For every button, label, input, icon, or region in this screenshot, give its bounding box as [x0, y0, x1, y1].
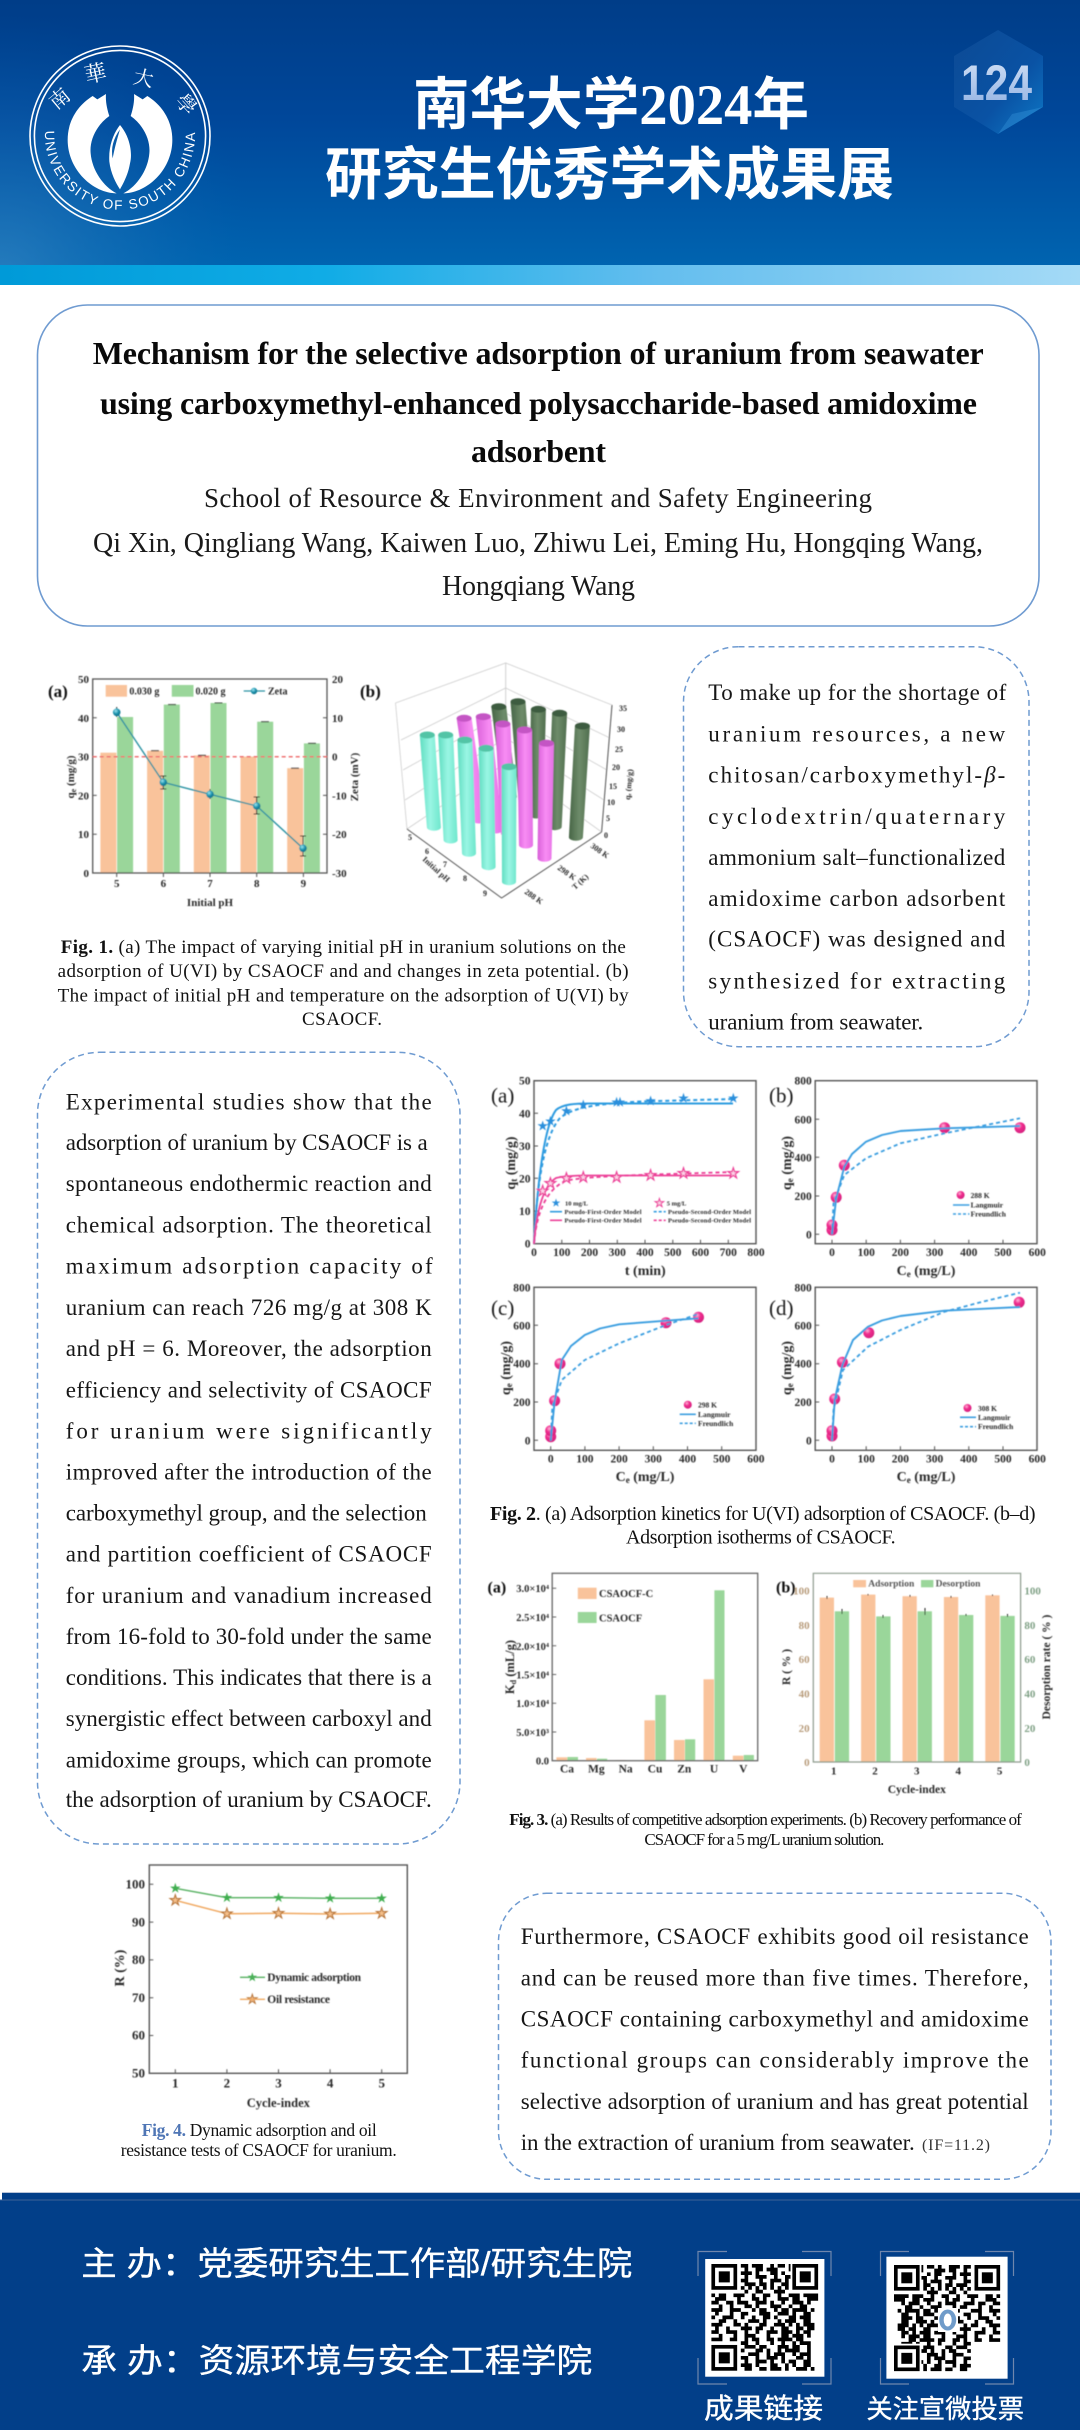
chart: fig 2c isotherm 298 K: 100	[576, 1453, 594, 1465]
panel: experimental findings text: and partition coefficient of CSAOCF	[66, 1542, 432, 1567]
chart: fig 2b isotherm 288 K: e	[785, 1178, 795, 1182]
chart: fig 2d isotherm 308 K	[769, 1282, 1046, 1485]
badge: number 124	[954, 30, 1043, 134]
chart: fig 2b isotherm 288 K: C	[897, 1264, 907, 1279]
chart: fig 2a adsorption kinetics: 600	[692, 1247, 709, 1259]
chart: fig 2a adsorption kinetics: 0	[525, 1239, 531, 1251]
chart: fig 2b isotherm 288 K: Freundlich	[971, 1210, 1007, 1218]
chart: fig 3a competitive adsorption: Cu	[648, 1764, 663, 1776]
chart: fig 2c isotherm 298 K: 400	[679, 1453, 696, 1465]
panel: introduction text: To make up for the shortage of	[708, 680, 1007, 705]
panel: conclusion text: (IF=11.2)	[922, 2137, 990, 2154]
chart: fig 1b 3D cylinders: 6	[425, 847, 429, 856]
chart: fig 2b isotherm 288 K: 200	[794, 1191, 812, 1203]
chart: fig 1a pH bars and zeta: (a)	[48, 682, 68, 701]
panel: experimental findings text: uranium can reach 726 mg/g at 308 K	[66, 1295, 432, 1320]
chart: fig 3b recovery performance: 1	[831, 1766, 836, 1778]
chart: fig 1a pH bars and zeta: 0	[84, 868, 90, 880]
panel: paper title card	[38, 305, 1039, 626]
chart: fig 3b recovery performance: Desorption rate ( % )	[1041, 1614, 1053, 1719]
panel: experimental findings text: improved after the introduction of the	[66, 1459, 432, 1484]
heading: paper title: adsorbent	[471, 433, 606, 469]
label: follow and vote: 关注宣微投票	[866, 2394, 1024, 2424]
panel: introduction text: uranium from seawater.	[708, 1009, 923, 1034]
chart: fig 1a pH bars and zeta: 10	[78, 829, 90, 841]
chart: fig 1a pH bars and zeta: 20	[78, 790, 90, 802]
chart: fig 2b isotherm 288 K: 800	[794, 1076, 812, 1088]
logo: University of South China: 南	[42, 80, 76, 115]
chart: fig 2a adsorption kinetics: 10 mg/L	[565, 1200, 589, 1208]
chart: fig 3a competitive adsorption: 0.0	[536, 1757, 549, 1768]
panel: experimental findings text: conditions. This indicates that there is a	[66, 1665, 432, 1690]
chart: fig 2d isotherm 308 K: 100	[858, 1453, 875, 1465]
text: school: School of Resource & Environment and Safety Engineering	[204, 483, 872, 513]
chart: fig 3a competitive adsorption: Mg	[588, 1764, 605, 1776]
heading: paper title	[93, 335, 984, 469]
caption: fig 3	[509, 1810, 1022, 1849]
chart: fig 2c isotherm 298 K: 200	[513, 1397, 531, 1409]
chart: fig 1b 3D cylinders: qₑ (mg/g)	[623, 768, 635, 800]
panel: introduction text: cyclodextrin/quaternary	[708, 804, 1006, 829]
chart: fig 3a competitive adsorption: CSAOCF-C	[599, 1589, 653, 1600]
chart: fig 2c isotherm 298 K: q	[499, 1387, 514, 1395]
chart: fig 3a competitive adsorption: (mL/g)	[503, 1640, 517, 1680]
chart: fig 3b recovery performance: 80	[1024, 1620, 1036, 1632]
figure 2	[490, 1076, 1046, 1548]
chart: fig 2b isotherm 288 K: 0	[806, 1229, 812, 1241]
chart: fig 3b recovery performance: 4	[955, 1766, 961, 1778]
chart: fig 2c isotherm 298 K: 400	[513, 1359, 531, 1371]
chart: fig 1b 3D cylinders: 8	[463, 874, 467, 883]
panel: conclusion text: functional groups can considerably improve the	[521, 2048, 1029, 2073]
chart: fig 1b 3D cylinders: 10	[607, 798, 615, 807]
chart: fig 2b isotherm 288 K: 400	[960, 1247, 978, 1259]
caption: fig 4: resistance tests of CSAOCF for uranium.	[121, 2140, 397, 2160]
chart: fig 2c isotherm 298 K: 300	[645, 1453, 662, 1465]
chart: fig 2d isotherm 308 K: 600	[1029, 1453, 1046, 1465]
chart: fig 2b isotherm 288 K: 288 K	[971, 1191, 990, 1200]
chart: fig 2d isotherm 308 K: 800	[794, 1282, 812, 1294]
chart: fig 2a adsorption kinetics: 200	[581, 1247, 598, 1259]
chart: fig 1b 3D cylinders: 20	[612, 763, 620, 772]
chart: fig 2b isotherm 288 K: 400	[794, 1152, 812, 1164]
chart: fig 2c isotherm 298 K: (mg/g)	[499, 1341, 514, 1383]
chart: fig 2d isotherm 308 K: Freundlich	[978, 1422, 1014, 1431]
chart: fig 3b recovery performance: 60	[799, 1654, 810, 1666]
chart: fig 1a pH bars and zeta: 30	[78, 752, 90, 764]
chart: fig 1b 3D cylinders: 35	[619, 704, 627, 713]
banner title	[325, 74, 894, 207]
panel: experimental findings text: spontaneous endothermic reaction and	[66, 1171, 432, 1196]
chart: fig 2c isotherm 298 K: 600	[513, 1320, 531, 1332]
chart: fig 2c isotherm 298 K	[491, 1282, 765, 1485]
chart: fig 3a competitive adsorption: 2.0×10⁴	[516, 1642, 550, 1653]
chart: fig 2d isotherm 308 K: 0	[829, 1453, 835, 1465]
QR code: results link	[698, 2252, 831, 2384]
chart: fig 2b isotherm 288 K: (mg/g)	[780, 1136, 795, 1178]
chart: fig 1a pH bars and zeta: Initial pH	[187, 897, 234, 909]
text: authors: Hongqiang Wang	[442, 571, 635, 602]
chart: fig 2b isotherm 288 K: 600	[794, 1114, 812, 1126]
panel: experimental findings text: Experimental studies show that the	[66, 1089, 432, 1114]
chart: fig 1b 3D cylinders: Initial pH	[421, 855, 452, 884]
chart: fig 3a competitive adsorption: U	[710, 1764, 719, 1776]
chart: fig 4 dynamic adsorption and oil resistance: 90	[132, 1914, 145, 1929]
chart: fig 2d isotherm 308 K: (d)	[769, 1296, 794, 1320]
panel: conclusion text: Furthermore, CSAOCF exhibits good oil resistance	[521, 1924, 1029, 1949]
chart: fig 1a pH bars and zeta: 0	[332, 752, 338, 764]
chart: fig 2b isotherm 288 K: Langmuir	[971, 1200, 1004, 1210]
panel: introduction text: chitosan/carboxymethyl-β-	[708, 763, 1005, 788]
panel: experimental findings text: for uranium were significantly	[66, 1418, 432, 1443]
chart: fig 3b recovery performance: 20	[1024, 1723, 1036, 1735]
chart: fig 2a adsorption kinetics: 300	[609, 1247, 626, 1259]
chart: fig 2d isotherm 308 K: 200	[794, 1397, 812, 1409]
chart: fig 2b isotherm 288 K: 500	[994, 1247, 1012, 1259]
figure 1	[48, 663, 635, 1030]
chart: fig 4 dynamic adsorption and oil resistance: 100	[126, 1876, 145, 1892]
chart: fig 3b recovery performance: 100	[1024, 1586, 1041, 1598]
chart: fig 4 dynamic adsorption and oil resistance: 1	[172, 2075, 179, 2090]
banner title: 研究生优秀学术成果展	[325, 144, 894, 207]
chart: fig 4 dynamic adsorption and oil resistance: 60	[132, 2028, 145, 2043]
figure 3	[488, 1573, 1053, 1849]
chart: fig 1a pH bars and zeta: 10	[332, 713, 344, 725]
chart: fig 2b isotherm 288 K	[769, 1076, 1046, 1279]
chart: fig 3a competitive adsorption: Zn	[677, 1764, 692, 1776]
chart: fig 3a competitive adsorption: d	[509, 1679, 518, 1684]
label: results link: 成果链接	[704, 2393, 823, 2424]
chart: fig 2a adsorption kinetics: 100	[553, 1247, 571, 1259]
chart: fig 1a pH bars and zeta	[48, 674, 361, 909]
chart: fig 1a pH bars and zeta: (mg/g)	[65, 755, 77, 789]
chart: fig 2a adsorption kinetics: q	[504, 1182, 519, 1190]
chart: fig 4 dynamic adsorption and oil resistance: 50	[132, 2066, 145, 2080]
chart: fig 1a pH bars and zeta: -30	[332, 868, 347, 880]
chart: fig 1a pH bars and zeta: Zeta (mV)	[349, 752, 361, 801]
chart: fig 3b recovery performance: 100	[793, 1586, 810, 1598]
chart: fig 4 dynamic adsorption and oil resistance: Cycle-index	[247, 2096, 311, 2110]
chart: fig 1a pH bars and zeta: 6	[161, 878, 167, 890]
chart: fig 2a adsorption kinetics: Pseudo-Second-Order Model	[668, 1218, 751, 1225]
chart: fig 3a competitive adsorption	[488, 1573, 758, 1776]
chart: fig 1b 3D cylinders: 308 K	[589, 841, 611, 861]
panel: experimental findings text: chemical adsorption. The theoretical	[66, 1212, 432, 1237]
chart: fig 2b isotherm 288 K: 600	[1029, 1247, 1046, 1259]
heading: paper title: using carboxymethyl-enhanced polysaccharide-based amidoxime	[100, 385, 977, 421]
caption: fig 1: The impact of initial pH and temperature on the adsorption of U(VI) by	[58, 986, 629, 1007]
chart: fig 2a adsorption kinetics: (mg/g)	[504, 1136, 519, 1179]
chart: fig 2d isotherm 308 K: (mg/L)	[911, 1470, 956, 1485]
chart: fig 3a competitive adsorption: 2.5×10⁴	[516, 1613, 550, 1624]
chart: fig 4 dynamic adsorption and oil resistance	[113, 1865, 407, 2110]
chart: fig 2a adsorption kinetics: 500	[664, 1247, 682, 1259]
caption: fig 2: Fig. 2. (a) Adsorption kinetics for U(VI) adsorption of CSAOCF. (b–d)	[490, 1503, 1036, 1525]
chart: fig 3a competitive adsorption: Na	[619, 1764, 633, 1776]
panel: experimental findings text: synergistic effect between carboxyl and	[66, 1706, 432, 1731]
chart: fig 4 dynamic adsorption and oil resistance: 3	[275, 2075, 282, 2090]
chart: fig 1b 3D cylinders: 5	[606, 814, 610, 823]
chart: fig 1b 3D cylinders: 288 K	[523, 887, 545, 907]
caption: fig 3: CSAOCF for a 5 mg/L uranium solution.	[644, 1830, 884, 1849]
text: authors	[93, 528, 983, 602]
chart: fig 2c isotherm 298 K: 0	[548, 1453, 554, 1465]
chart: fig 2c isotherm 298 K: e	[504, 1383, 514, 1387]
chart: fig 1b 3D cylinders: 9	[483, 889, 487, 898]
chart: fig 1a pH bars and zeta: -20	[332, 829, 347, 841]
chart: fig 1a pH bars and zeta: q	[65, 792, 77, 798]
chart: fig 3a competitive adsorption: 1.0×10⁴	[516, 1699, 550, 1710]
chart: fig 3b recovery performance: 3	[914, 1766, 920, 1778]
panel: experimental findings text: adsorption of uranium by CSAOCF is a	[66, 1130, 428, 1155]
panel: introduction text: amidoxime carbon adsorbent	[708, 886, 1006, 911]
chart: fig 2b isotherm 288 K: 100	[858, 1247, 875, 1259]
chart: fig 2c isotherm 298 K: 500	[713, 1453, 731, 1465]
panel: conclusion text: and can be reused more than five times. Therefore,	[521, 1965, 1029, 1990]
panel: introduction text: uranium resources, a new	[708, 722, 1006, 747]
chart: fig 1a pH bars and zeta: 7	[207, 878, 213, 890]
chart: fig 1b 3D cylinders: (b)	[360, 682, 381, 701]
chart: fig 1a pH bars and zeta: e	[69, 788, 78, 792]
panel: introduction text	[684, 647, 1029, 1047]
logo: University of South China: UNIVERSITY OF SOUTH CHINA	[44, 132, 196, 210]
chart: fig 1b 3D cylinders: 7	[443, 860, 447, 869]
chart: fig 2d isotherm 308 K: 400	[960, 1453, 978, 1465]
chart: fig 2b isotherm 288 K: e	[907, 1269, 911, 1279]
chart: fig 1b 3D cylinders: 0	[604, 831, 608, 840]
panel: experimental findings text: amidoxime groups, which can promote	[66, 1748, 432, 1772]
chart: fig 3a competitive adsorption: CSAOCF	[599, 1613, 642, 1624]
chart: fig 3b recovery performance: 80	[799, 1620, 810, 1632]
chart: fig 2d isotherm 308 K: 300	[926, 1453, 943, 1465]
chart: fig 3b recovery performance: 5	[997, 1766, 1003, 1778]
chart: fig 2d isotherm 308 K: 600	[794, 1320, 812, 1332]
chart: fig 2c isotherm 298 K: e	[626, 1475, 630, 1485]
caption: fig 1	[58, 937, 629, 1030]
chart: fig 3b recovery performance	[776, 1573, 1053, 1796]
chart: fig 4 dynamic adsorption and oil resistance: Oil resistance	[267, 1994, 330, 2006]
footer band	[0, 2192, 1080, 2430]
chart: fig 1b 3D cylinders: T (K)	[570, 872, 591, 891]
chart: fig 2a adsorption kinetics: 40	[519, 1108, 531, 1120]
chart: fig 4 dynamic adsorption and oil resistance: R (%)	[113, 1949, 128, 1986]
caption: fig 2	[490, 1503, 1036, 1548]
chart: fig 2a adsorption kinetics: 50	[519, 1076, 531, 1088]
chart: fig 2c isotherm 298 K: (c)	[491, 1296, 514, 1320]
chart: fig 3b recovery performance: 60	[1024, 1654, 1036, 1666]
caption: fig 3: Fig. 3. (a) Results of competitive adsorption experiments. (b) Recovery performance of	[509, 1810, 1022, 1829]
chart: fig 2b isotherm 288 K: 300	[926, 1247, 943, 1259]
panel: introduction text: ammonium salt–functionalized	[708, 845, 1006, 870]
chart: fig 2a adsorption kinetics: 800	[747, 1247, 765, 1259]
chart: fig 2b isotherm 288 K: 200	[892, 1247, 909, 1259]
chart: fig 4 dynamic adsorption and oil resistance: 2	[224, 2075, 230, 2090]
chart: fig 2d isotherm 308 K: e	[785, 1383, 795, 1387]
chart: fig 1a pH bars and zeta: 0.020 g	[196, 686, 226, 698]
chart: fig 4 dynamic adsorption and oil resistance: Dynamic adsorption	[267, 1972, 362, 1984]
logo: University of South China: 學	[170, 86, 205, 120]
panel: introduction text: synthesized for extracting	[708, 968, 1006, 993]
chart: fig 1b 3D cylinders: 5	[408, 833, 412, 842]
chart: fig 3a competitive adsorption: 5.0×10³	[516, 1728, 549, 1739]
chart: fig 4 dynamic adsorption and oil resistance: 5	[378, 2075, 385, 2090]
chart: fig 3b recovery performance: (b)	[776, 1580, 796, 1597]
chart: fig 2c isotherm 298 K: 0	[525, 1435, 531, 1447]
chart: fig 2a adsorption kinetics: Pseudo-First-Order Model	[564, 1218, 642, 1225]
chart: fig 2a adsorption kinetics: 400	[636, 1247, 654, 1259]
panel: experimental findings text	[38, 1052, 460, 1844]
chart: fig 2c isotherm 298 K: C	[616, 1470, 626, 1485]
chart: fig 3b recovery performance: Desorption	[936, 1580, 981, 1590]
text: co-organizer: 承 办：资源环境与安全工程学院	[81, 2342, 592, 2379]
chart: fig 1b 3D cylinders: 25	[615, 745, 623, 754]
chart: fig 4 dynamic adsorption and oil resistance: 80	[132, 1952, 145, 1967]
chart: fig 4 dynamic adsorption and oil resistance: 70	[132, 1990, 145, 2005]
caption: fig 1: Fig. 1. (a) The impact of varying initial pH in uranium solutions on the	[61, 937, 626, 958]
chart: fig 2c isotherm 298 K: 200	[610, 1453, 628, 1465]
panel: experimental findings text: and pH = 6. Moreover, the adsorption	[66, 1336, 432, 1361]
chart: fig 1b 3D cylinders	[360, 663, 635, 907]
chart: fig 2d isotherm 308 K: 0	[806, 1435, 812, 1447]
chart: fig 2c isotherm 298 K: Langmuir	[698, 1410, 731, 1419]
chart: fig 1a pH bars and zeta: 5	[114, 878, 120, 890]
heading: paper title: Mechanism for the selective adsorption of uranium from seawater	[93, 335, 984, 371]
caption: fig 1: CSAOCF.	[302, 1009, 382, 1030]
chart: fig 3b recovery performance: Adsorption	[868, 1580, 915, 1590]
chart: fig 2a adsorption kinetics: (a)	[491, 1084, 514, 1108]
chart: fig 2c isotherm 298 K: 600	[747, 1453, 765, 1465]
chart: fig 2d isotherm 308 K: (mg/g)	[780, 1341, 795, 1383]
chart: fig 3b recovery performance: 40	[1024, 1688, 1036, 1700]
chart: fig 1b 3D cylinders: 30	[617, 725, 625, 734]
figure 4	[113, 1865, 407, 2160]
chart: fig 3b recovery performance: 0	[804, 1757, 810, 1769]
badge: number 124: 124	[961, 55, 1032, 111]
chart: fig 2d isotherm 308 K: 500	[994, 1453, 1012, 1465]
chart: fig 4 dynamic adsorption and oil resistance: 4	[327, 2075, 334, 2090]
caption: fig 1: adsorption of U(VI) by CSAOCF and and changes in zeta potential. (b)	[58, 961, 629, 982]
header banner	[0, 0, 1080, 285]
caption: fig 2: Adsorption isotherms of CSAOCF.	[626, 1526, 896, 1548]
chart: fig 2a adsorption kinetics: 5 mg/L	[667, 1200, 687, 1208]
chart: fig 3a competitive adsorption: Ca	[560, 1764, 574, 1776]
logo: University of South China: 華	[81, 55, 109, 90]
chart: fig 2d isotherm 308 K: 308 K	[978, 1404, 997, 1413]
panel: experimental findings text: from 16-fold to 30-fold under the same	[66, 1624, 432, 1649]
chart: fig 2a adsorption kinetics: 10	[519, 1206, 531, 1218]
chart: fig 1a pH bars and zeta: 0.030 g	[129, 686, 159, 698]
chart: fig 2b isotherm 288 K: 0	[829, 1247, 835, 1259]
panel: introduction text: (CSAOCF) was designed and	[708, 927, 1006, 952]
panel: conclusion text: in the extraction of uranium from seawater.	[521, 2130, 915, 2155]
chart: fig 3a competitive adsorption: K	[503, 1684, 517, 1694]
chart: fig 2a adsorption kinetics: Pseudo-Second-Order Model	[668, 1209, 751, 1216]
chart: fig 3a competitive adsorption: (a)	[488, 1580, 506, 1597]
chart: fig 2b isotherm 288 K: q	[780, 1182, 795, 1190]
banner title: 南华大学2024年	[413, 74, 809, 137]
logo: University of South China: 大	[131, 60, 157, 93]
text: organizer: 主 办：党委研究生工作部/研究生院	[81, 2245, 632, 2282]
chart: fig 1a pH bars and zeta: 20	[332, 674, 344, 686]
chart: fig 2a adsorption kinetics: t (min)	[625, 1264, 666, 1279]
chart: fig 3a competitive adsorption: V	[739, 1764, 748, 1776]
chart: fig 1a pH bars and zeta: 8	[254, 878, 260, 890]
panel: experimental findings text: efficiency and selectivity of CSAOCF	[66, 1377, 432, 1402]
chart: fig 2b isotherm 288 K: (b)	[769, 1084, 794, 1108]
chart: fig 3b recovery performance: 0	[1024, 1757, 1030, 1769]
chart: fig 2a adsorption kinetics: 30	[519, 1141, 531, 1153]
chart: fig 3a competitive adsorption: 1.5×10⁴	[516, 1670, 550, 1682]
chart: fig 2a adsorption kinetics: Pseudo-First-Order Model	[564, 1209, 642, 1216]
QR code: WeChat vote	[880, 2252, 1014, 2384]
chart: fig 2a adsorption kinetics: 700	[720, 1247, 737, 1259]
chart: fig 2a adsorption kinetics: 20	[519, 1173, 531, 1185]
chart: fig 3b recovery performance: Cycle-index	[888, 1784, 946, 1796]
chart: fig 3b recovery performance: 20	[799, 1723, 810, 1735]
chart: fig 3b recovery performance: 2	[872, 1766, 878, 1778]
chart: fig 2c isotherm 298 K: 298 K	[698, 1401, 717, 1410]
chart: fig 1b 3D cylinders: 15	[609, 782, 617, 791]
panel: conclusion text: selective adsorption of uranium and has great potential	[521, 2089, 1029, 2114]
chart: fig 1a pH bars and zeta: 40	[78, 713, 90, 725]
chart: fig 1a pH bars and zeta: 50	[78, 674, 90, 686]
panel: experimental findings text: carboxymethyl group, and the selection	[66, 1500, 427, 1526]
chart: fig 1a pH bars and zeta: -10	[332, 790, 347, 802]
panel: experimental findings text: for uranium and vanadium increased	[66, 1583, 432, 1608]
chart: fig 2d isotherm 308 K: C	[897, 1470, 907, 1485]
chart: fig 1a pH bars and zeta: 9	[301, 878, 307, 890]
chart: fig 2d isotherm 308 K: Langmuir	[978, 1413, 1011, 1422]
chart: fig 2d isotherm 308 K: q	[780, 1387, 795, 1395]
chart: fig 2c isotherm 298 K: 800	[513, 1282, 531, 1294]
chart: fig 2b isotherm 288 K: (mg/L)	[911, 1264, 956, 1279]
panel: conclusion text	[498, 1893, 1051, 2179]
chart: fig 2a adsorption kinetics: t	[509, 1179, 519, 1182]
chart: fig 2a adsorption kinetics	[491, 1076, 765, 1279]
caption: fig 4	[121, 2120, 397, 2160]
logo: University of South China	[29, 45, 211, 227]
chart: fig 3b recovery performance: R ( % )	[781, 1649, 793, 1685]
panel: experimental findings text: maximum adsorption capacity of	[66, 1253, 433, 1278]
chart: fig 1b 3D cylinders: 298 K	[556, 863, 578, 883]
chart: fig 2d isotherm 308 K: 200	[892, 1453, 909, 1465]
chart: fig 3b recovery performance: 40	[799, 1688, 810, 1700]
chart: fig 2a adsorption kinetics: 0	[531, 1247, 537, 1259]
chart: fig 2c isotherm 298 K: Freundlich	[698, 1419, 734, 1428]
chart: fig 2d isotherm 308 K: e	[907, 1475, 911, 1485]
text: authors: Qi Xin, Qingliang Wang, Kaiwen Luo, Zhiwu Lei, Eming Hu, Hongqing Wang,	[93, 528, 983, 559]
chart: fig 1a pH bars and zeta: Zeta	[268, 686, 287, 698]
caption: fig 4: Fig. 4. Dynamic adsorption and oil	[142, 2120, 377, 2140]
panel: conclusion text: CSAOCF containing carboxymethyl and amidoxime	[521, 2007, 1029, 2032]
chart: fig 3a competitive adsorption: 3.0×10⁴	[516, 1584, 550, 1595]
chart: fig 2c isotherm 298 K: (mg/L)	[630, 1470, 675, 1485]
panel: experimental findings text: the adsorption of uranium by CSAOCF.	[66, 1787, 432, 1812]
chart: fig 2d isotherm 308 K: 400	[794, 1359, 812, 1371]
